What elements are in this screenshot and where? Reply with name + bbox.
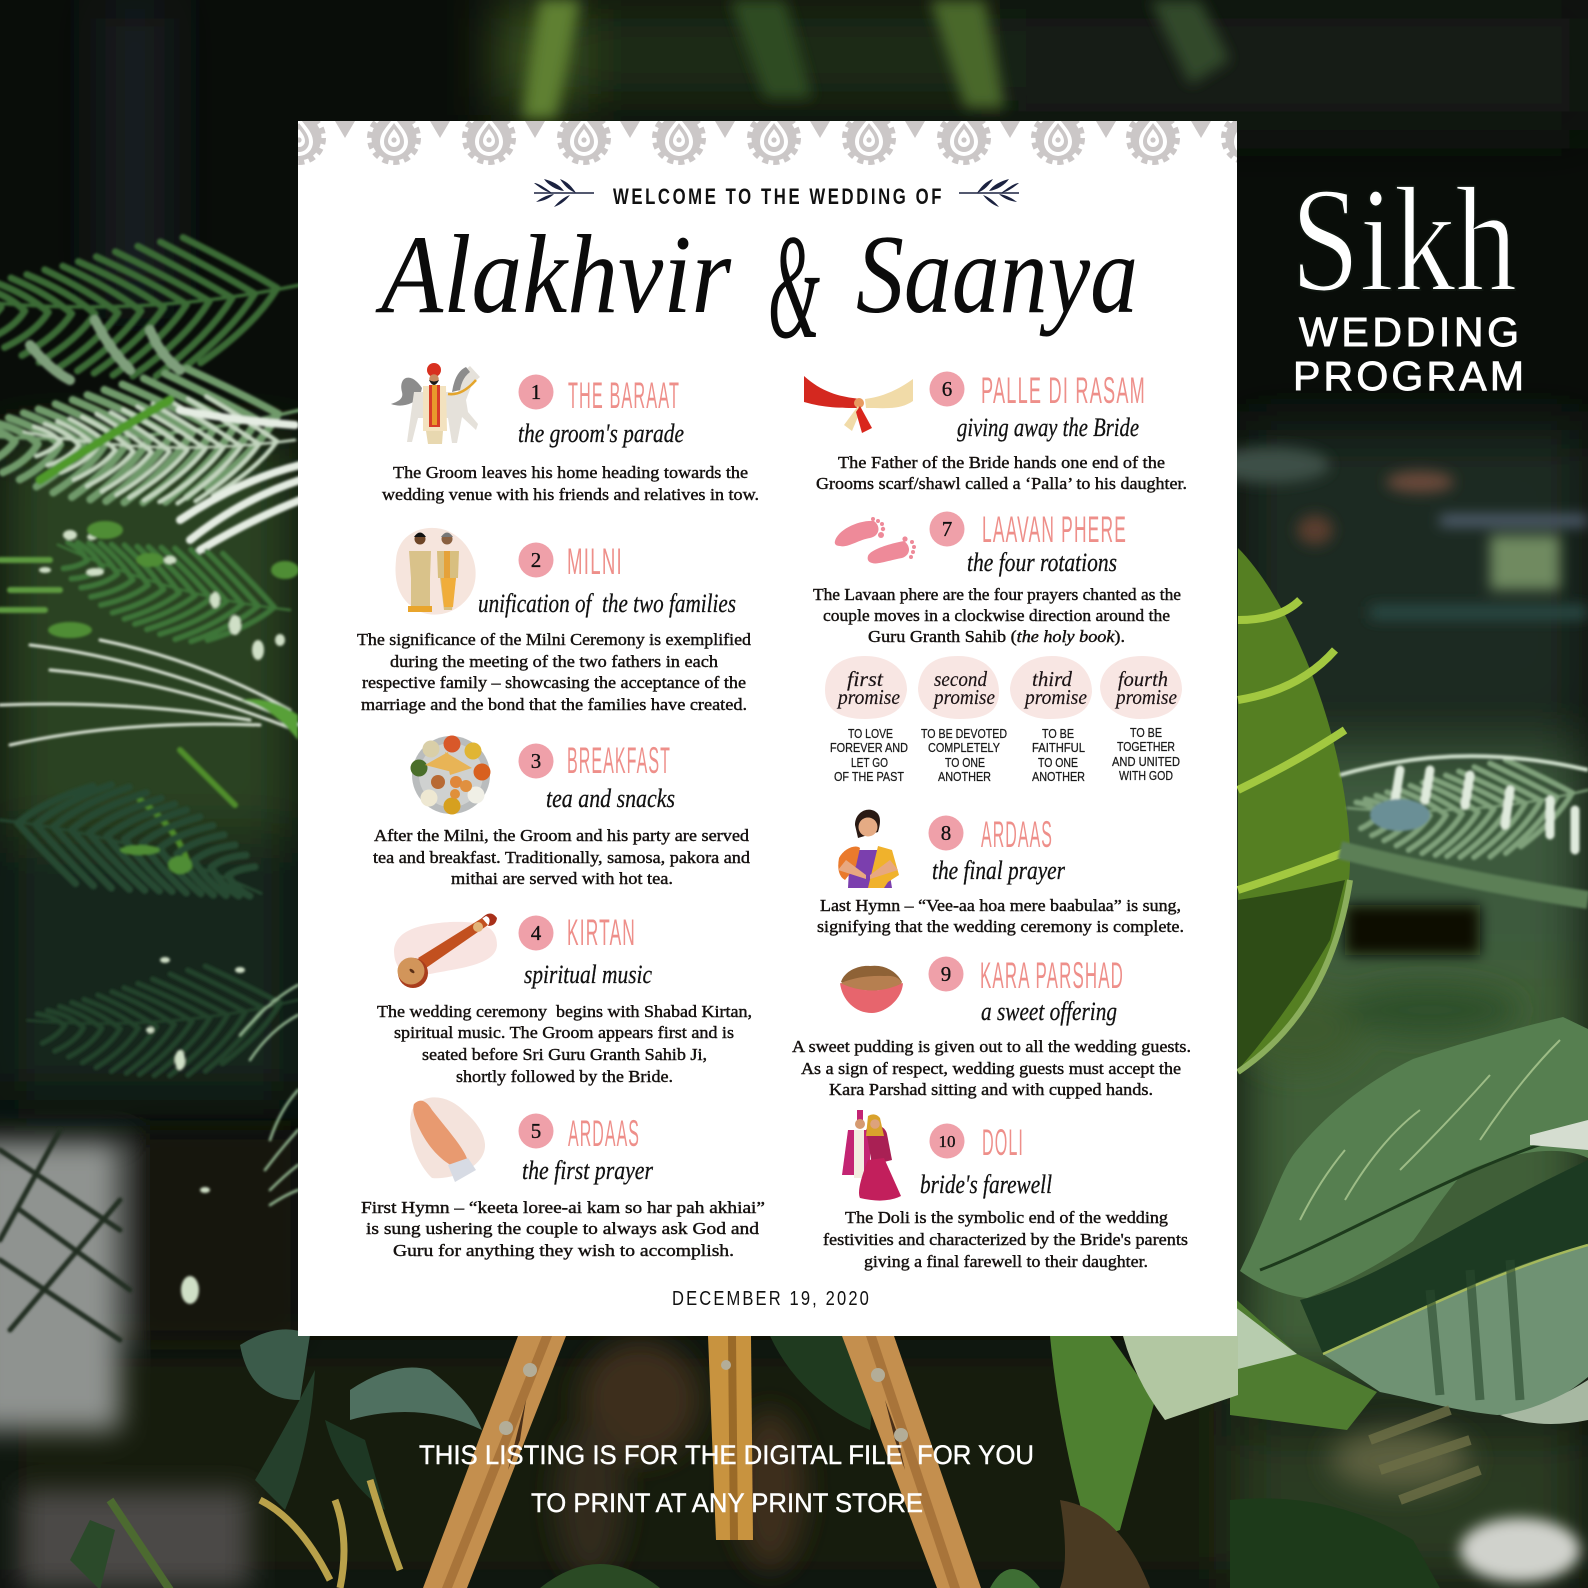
couple names title: Saanya <box>856 213 1138 337</box>
promise 1: first <box>847 667 884 691</box>
promise 4: promise <box>1114 685 1177 709</box>
step 4: kirtan: 4 <box>531 921 542 945</box>
description: The wedding ceremony begins with Shabad Kirtan, <box>377 1002 752 1021</box>
step 3: breakfast: BREAKFAST <box>567 740 671 781</box>
step 1: the baraat: THE BARAAT <box>568 375 680 416</box>
bokeh highlights <box>39 530 285 1304</box>
promise 4: AND UNITED <box>1112 755 1180 769</box>
description <box>357 630 751 714</box>
description: signifying that the wedding ceremony is complete. <box>817 917 1184 936</box>
step 4: kirtan: spiritual music <box>524 960 652 989</box>
step 7: laavan phere: the four rotations <box>967 548 1117 577</box>
promise 1: FOREVER AND <box>830 741 908 755</box>
description <box>377 1002 752 1086</box>
promise 3: promise <box>1023 685 1087 709</box>
description <box>792 1037 1191 1099</box>
description <box>373 826 750 888</box>
icon: footprints <box>835 517 916 563</box>
step 3: breakfast: tea and snacks <box>546 784 675 813</box>
step 3: breakfast: 3 <box>531 749 541 773</box>
bottom notice: THIS LISTING IS FOR THE DIGITAL FILE FOR YOU <box>419 1440 1034 1470</box>
promise 2: COMPLETELY <box>928 741 1001 755</box>
description: shortly followed by the Bride. <box>456 1067 673 1086</box>
wooden easel <box>423 1336 981 1588</box>
step 8: ardaas final prayer: ARDAAS <box>981 814 1053 855</box>
step 9: kara parshad: KARA PARSHAD <box>980 955 1124 996</box>
description: First Hymn – “keeta loree-ai kam so har pah akhiai” <box>361 1198 765 1217</box>
description <box>823 1208 1188 1271</box>
description: tea and breakfast. Traditionally, samosa, pakora and <box>373 848 750 867</box>
promise 4 <box>1100 656 1182 783</box>
step 10: doli <box>823 1110 1188 1271</box>
promise 4: fourth <box>1118 667 1168 691</box>
step 2: milni <box>357 528 751 714</box>
description: Guru Granth Sahib ( the holy book ). <box>868 627 1125 646</box>
icon: knotted scarf <box>804 376 913 433</box>
Sikh word: Sikh <box>1291 157 1517 323</box>
description: giving a final farewell to their daughter. <box>864 1252 1148 1271</box>
promise 2: ANOTHER <box>938 770 991 784</box>
step 7: laavan phere: 7 <box>942 517 952 541</box>
description: The Father of the Bride hands one end of the <box>838 453 1165 472</box>
promise 3: third <box>1032 667 1072 691</box>
couple names title <box>375 204 1138 370</box>
promise 3: TO ONE <box>1038 756 1078 770</box>
description: couple moves in a clockwise direction around the <box>823 606 1170 625</box>
description <box>813 585 1181 646</box>
couple names title: & <box>768 204 820 370</box>
lower foliage <box>70 1329 1238 1588</box>
promise 1: TO LOVE <box>848 727 893 741</box>
step 4: kirtan: KIRTAN <box>567 912 636 953</box>
step 5: ardaas first prayer: the first prayer <box>522 1156 654 1185</box>
step 2: milni: 2 <box>531 548 541 572</box>
promise 2: second <box>934 667 987 691</box>
step 7: laavan phere <box>813 509 1182 784</box>
couple names title: Alakhvir <box>375 213 731 337</box>
icon: praying hands <box>410 1097 485 1182</box>
bottom notice: TO PRINT AT ANY PRINT STORE <box>531 1488 923 1518</box>
right big leaves <box>1226 548 1588 1588</box>
promise 2 <box>918 656 1007 784</box>
icon: two fathers <box>396 528 476 615</box>
left palm fronds <box>0 222 312 1340</box>
promise 3: FAITHFUL <box>1032 741 1085 755</box>
promise 2: TO BE DEVOTED <box>921 727 1007 741</box>
description: The Groom leaves his home heading towards the <box>393 463 748 482</box>
step 6: palle di rasam <box>804 370 1187 493</box>
icon: sitar <box>394 913 497 988</box>
bottom notice <box>419 1440 1034 1518</box>
step 8: ardaas final prayer: the final prayer <box>932 856 1066 885</box>
step 2: milni: MILNI <box>567 541 623 582</box>
description: respective family – showcasing the acceptance of the <box>362 673 746 692</box>
wedding program words: PROGRAM <box>1293 353 1524 399</box>
step 5: ardaas first prayer <box>361 1097 765 1260</box>
icon: woman in sari <box>838 810 899 888</box>
description <box>382 463 759 504</box>
icon: left sprig <box>534 179 594 207</box>
step 2: milni: unification of the two families <box>478 589 736 618</box>
icon: right sprig <box>959 179 1019 207</box>
promise 1 <box>825 656 908 784</box>
description <box>817 896 1184 936</box>
promise 4: TOGETHER <box>1117 740 1175 754</box>
step 6: palle di rasam: 6 <box>942 377 952 401</box>
description: seated before Sri Guru Granth Sahib Ji, <box>422 1045 707 1064</box>
description: Last Hymn – “Vee-aa hoa mere baabulaa” is sung, <box>820 896 1181 915</box>
step 6: palle di rasam: PALLE DI RASAM <box>981 370 1146 411</box>
step 1: the baraat <box>382 363 759 504</box>
description: After the Milni, the Groom and his party are served <box>374 826 749 845</box>
step 9: kara parshad: 9 <box>941 962 951 986</box>
description: mithai are served with hot tea. <box>451 869 673 888</box>
step 10: doli: 10 <box>938 1132 956 1151</box>
icon: thali plate <box>410 736 490 814</box>
description: is sung ushering the couple to always ask God and <box>366 1219 759 1238</box>
step 10: doli: bride's farewell <box>920 1170 1052 1199</box>
description: Guru for anything they wish to accomplish. <box>393 1241 734 1260</box>
promise 4: TO BE <box>1130 726 1162 740</box>
header: welcome line with sprigs: WELCOME TO THE WEDDING OF <box>613 184 944 209</box>
description <box>816 453 1187 493</box>
step 10: doli: DOLI <box>982 1122 1024 1163</box>
header: welcome line with sprigs <box>534 179 1019 209</box>
promise 4: WITH GOD <box>1119 769 1173 783</box>
promise 2: TO ONE <box>945 756 985 770</box>
step 1: the baraat: the groom's parade <box>518 419 684 448</box>
promise 3: ANOTHER <box>1032 770 1085 784</box>
step 7: laavan phere: LAAVAN PHERE <box>982 509 1127 550</box>
description: festivities and characterized by the Bride's parents <box>823 1230 1188 1249</box>
step 1: the baraat: 1 <box>531 380 541 404</box>
description: wedding venue with his friends and relatives in tow. <box>382 485 759 504</box>
white sign panel <box>274 114 1272 1336</box>
icon: bride and groom <box>842 1110 901 1201</box>
icon: groom on horse <box>391 363 480 444</box>
description: marriage and the bond that the families have created. <box>361 695 747 714</box>
step 9: kara parshad: a sweet offering <box>981 997 1117 1026</box>
description: during the meeting of the two fathers in each <box>390 652 718 671</box>
description: Kara Parshad sitting and with cupped hands. <box>829 1080 1153 1099</box>
icon: bowl of pudding <box>840 966 903 1013</box>
right title: Sikh wedding program <box>1291 157 1524 399</box>
wedding program words: WEDDING <box>1299 309 1519 355</box>
description: The Lavaan phere are the four prayers chanted as the <box>813 585 1181 604</box>
promise 1: OF THE PAST <box>834 770 904 784</box>
step 3: breakfast <box>373 736 750 888</box>
description: A sweet pudding is given out to all the wedding guests. <box>792 1037 1191 1056</box>
step 9: kara parshad <box>792 955 1191 1099</box>
description: spiritual music. The Groom appears first and is <box>394 1023 734 1042</box>
decorative top band <box>298 121 1237 165</box>
description <box>361 1198 765 1260</box>
description: As a sign of respect, wedding guests must accept the <box>801 1059 1181 1078</box>
step 6: palle di rasam: giving away the Bride <box>957 413 1139 442</box>
promise 3: TO BE <box>1042 727 1074 741</box>
wedding program words <box>1293 309 1524 399</box>
promise 2: promise <box>932 685 995 709</box>
promise 3 <box>1010 656 1092 784</box>
step 5: ardaas first prayer: ARDAAS <box>568 1113 640 1154</box>
date: DECEMBER 19, 2020 <box>672 1288 871 1310</box>
step 8: ardaas final prayer <box>817 810 1184 936</box>
description: The Doli is the symbolic end of the wedding <box>845 1208 1168 1227</box>
promise 1: promise <box>836 685 900 709</box>
promise 1: LET GO <box>851 756 888 770</box>
description: Grooms scarf/shawl called a ‘Palla’ to his daughter. <box>816 474 1187 493</box>
step 4: kirtan <box>377 912 752 1086</box>
description: The significance of the Milni Ceremony is exemplified <box>357 630 751 649</box>
step 8: ardaas final prayer: 8 <box>941 821 951 845</box>
step 5: ardaas first prayer: 5 <box>531 1119 541 1143</box>
